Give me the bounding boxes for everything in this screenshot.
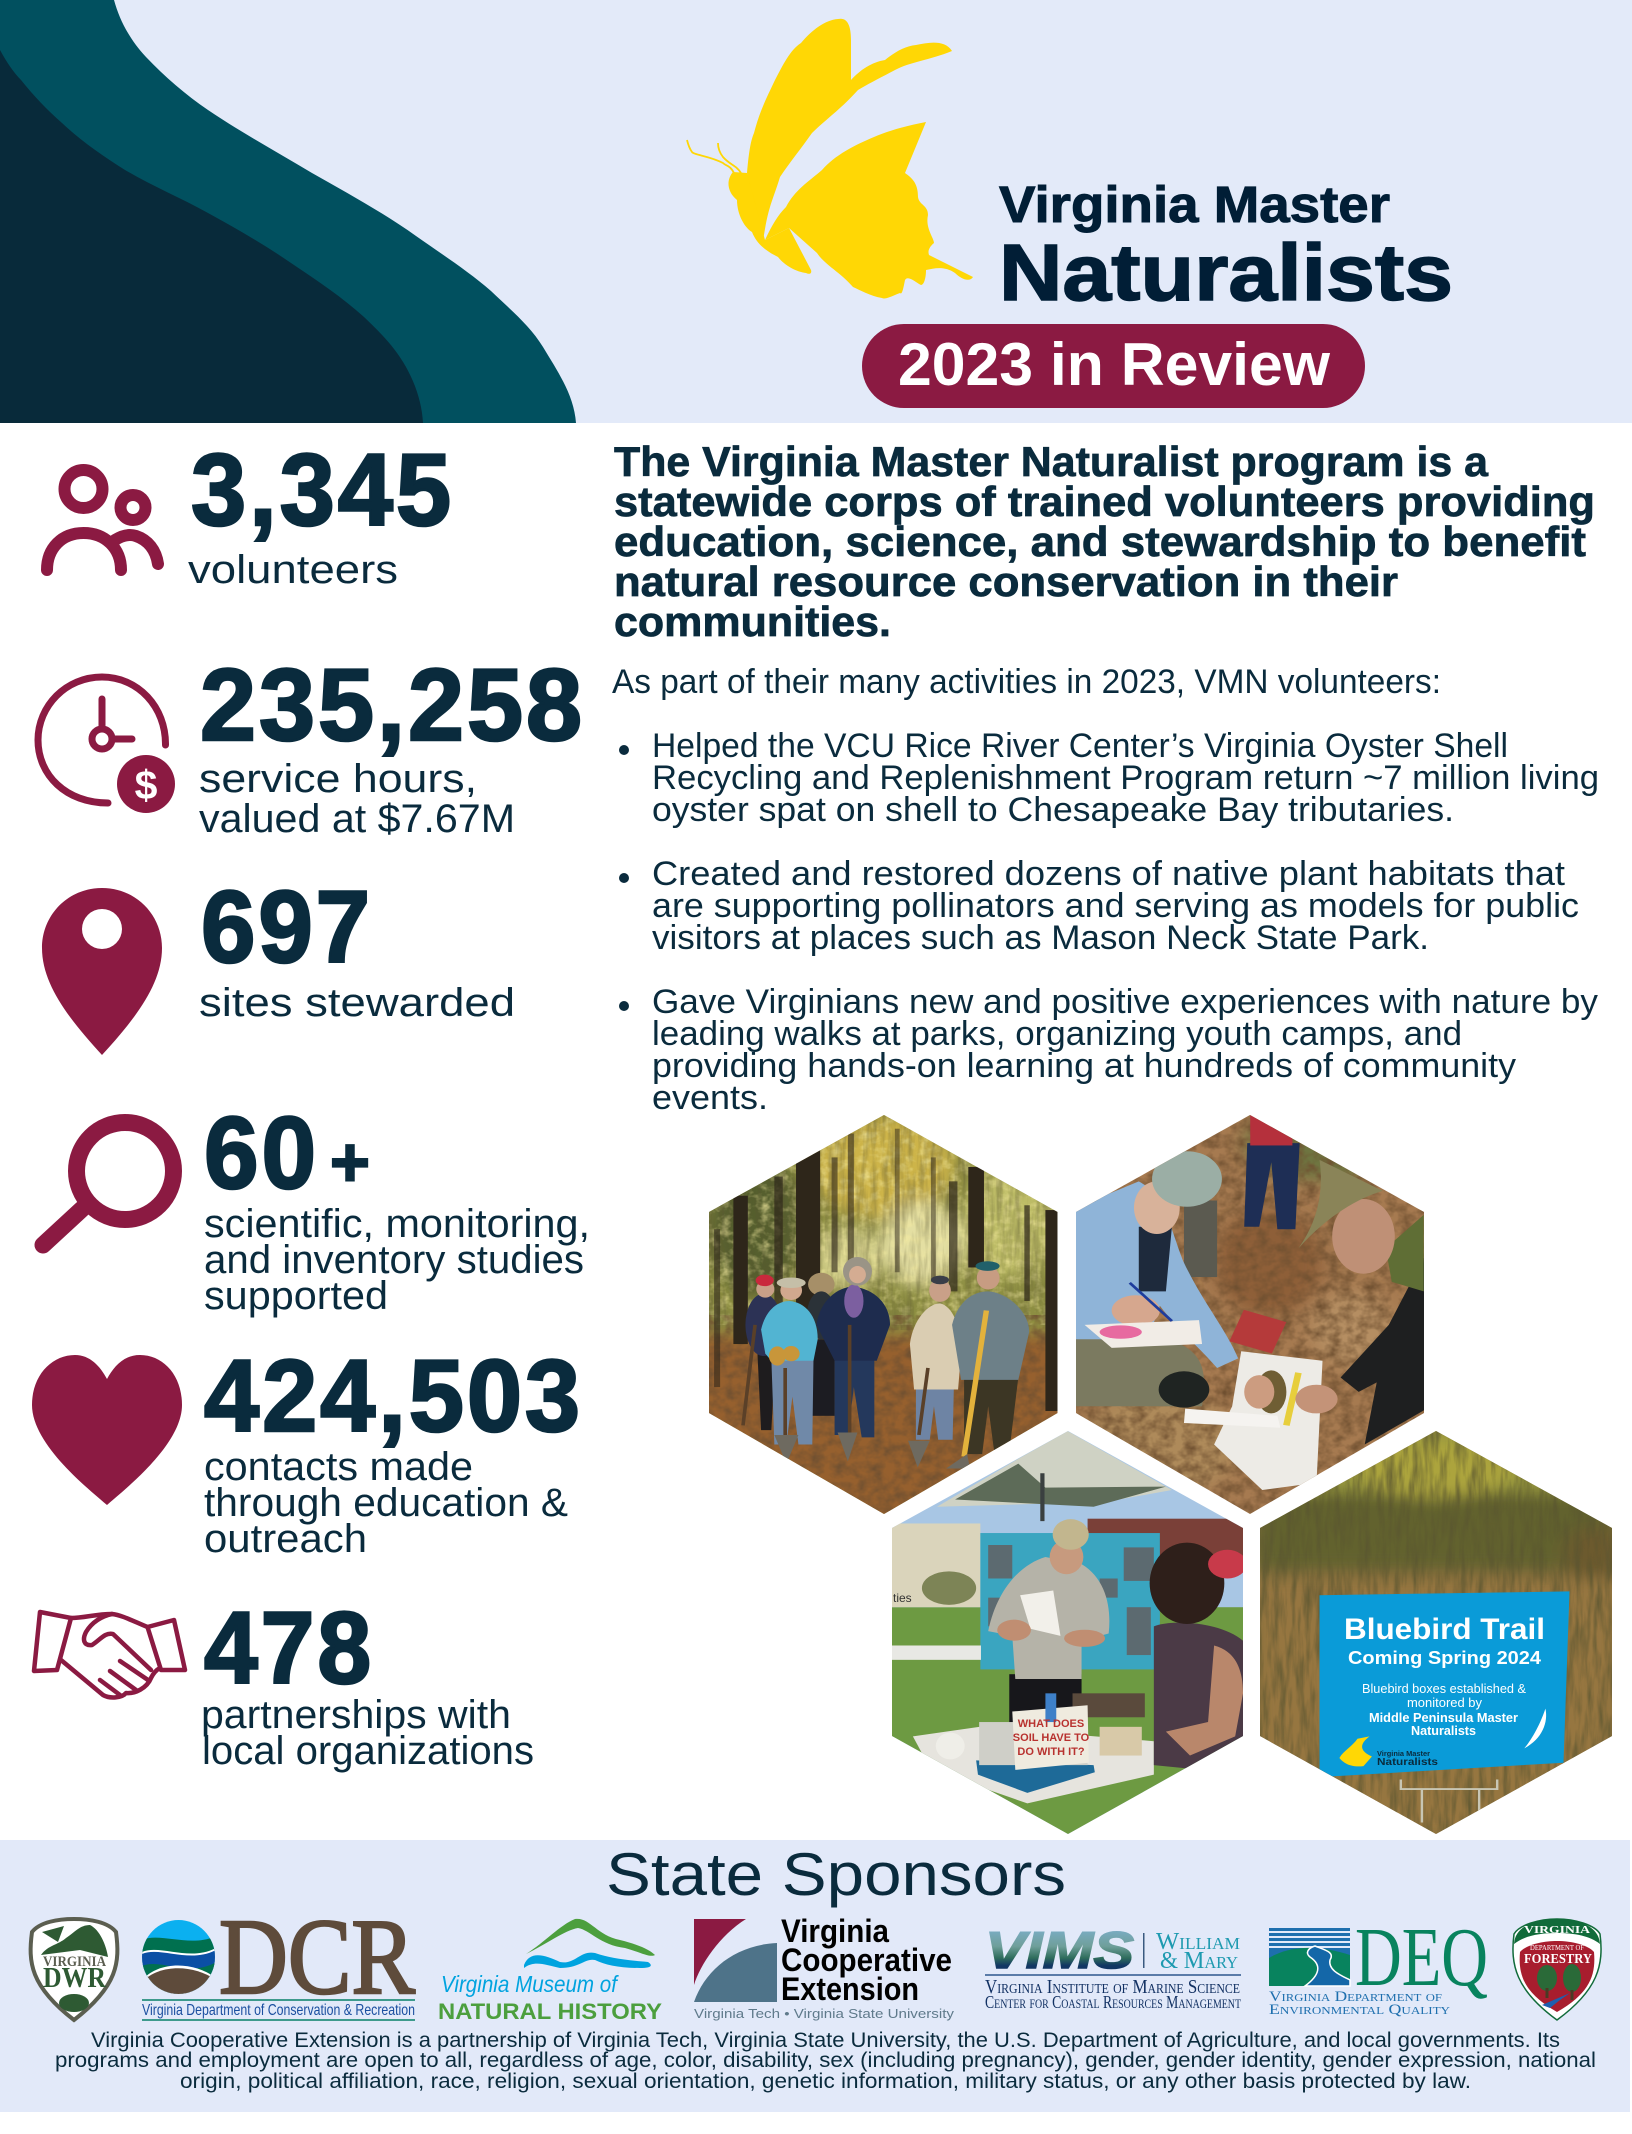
bullet: oyster spat: Recycling and Replenishment Program return ~7 million living: [652, 759, 1599, 797]
bullet: native plant habitats: visitors at places such as Mason Neck State Park.: [652, 919, 1429, 957]
logo: Virginia DEQ: Environmental Quality: [1269, 2002, 1450, 2018]
intro heading: The Virginia Master Naturalist program is a: [614, 438, 1489, 485]
stat: volunteers: volunteers: [188, 548, 398, 592]
sign text: Bluebird Trail: [1344, 1613, 1545, 1646]
sign logo text: Virginia Master: [1377, 1751, 1430, 1758]
logo: VIMS William and Mary: Center for Coastal Resources Management: [985, 1992, 1241, 2012]
heading: State Sponsors: State Sponsors: [606, 1841, 1066, 1908]
sign text: Bluebird boxes established &: [1362, 1681, 1526, 1696]
stat: service hours: service hours,: [199, 757, 477, 801]
man with hat: [1298, 1160, 1431, 1445]
brick building: [1088, 1518, 1243, 1556]
banner fragment text: ties: [893, 1591, 912, 1605]
stat: contacts made: through education &: [204, 1481, 568, 1525]
logo: Virginia Museum of Natural History: [438, 1919, 662, 2024]
icon: clock with dollar: [38, 677, 175, 813]
logo: Virginia Cooperative Extension: Cooperative: [781, 1942, 952, 1978]
stat: service hours: 235,258: [200, 648, 585, 762]
icon: handshake: [34, 1612, 185, 1697]
photo: outreach table under a tent: [889, 1425, 1250, 1842]
non-discrimination statement: origin, political affiliation, race, religion, sexual orientation, genetic information, military status, or any other basis protected by law.: [180, 2070, 1471, 2093]
bullet: native plant habitats: Created and restored dozens of native plant habitats that: [652, 855, 1566, 893]
intro heading: statewide corps of trained volunteers providing: [614, 478, 1595, 525]
icon: heart: [32, 1355, 182, 1505]
intro heading: education, science, and stewardship to benefit: [614, 518, 1586, 565]
logo: DCR: Virginia Department of Conservation & Recreation: [142, 2002, 415, 2019]
stat: contacts made: [32, 1339, 583, 1561]
bullet: nature experiences: Gave Virginians new and positive experiences with nature by: [652, 983, 1598, 1021]
logo: Virginia Cooperative Extension: [694, 1913, 955, 2021]
lead-in sentence: As part of their many activities in 2023, VMN volunteers:: [612, 663, 1441, 701]
sign text: Naturalists: [1411, 1723, 1476, 1738]
hindwing: [765, 122, 973, 299]
sign text: Middle Peninsula Master: [1369, 1710, 1518, 1725]
stat: partnerships: partnerships with: [201, 1693, 511, 1737]
logo: Virginia DEQ: Virginia Department of: [1269, 1989, 1442, 2005]
title pill: 2023 in Review: [862, 324, 1365, 408]
footer band: [0, 1840, 1630, 2112]
bullet: oyster spat: [619, 727, 1599, 829]
forewing: [747, 19, 952, 240]
logo: Virginia Cooperative Extension: Extension: [781, 1971, 919, 2007]
banner: [889, 1523, 980, 1607]
bullet: native plant habitats: [619, 855, 1579, 957]
non-discrimination statement: programs and employment are open to all, regardless of age, color, disability, sex (including pregnancy), gender, gender identity, gender expression, national: [55, 2049, 1596, 2072]
sign text: DO WITH IT?: [1017, 1746, 1085, 1758]
bullet: nature experiences: providing hands-on learning at hundreds of community: [652, 1047, 1516, 1085]
logo wordmark: Virginia Master Naturalists: [999, 176, 1453, 317]
sign text: monitored by: [1407, 1695, 1482, 1710]
non-discrimination statement: Virginia Cooperative Extension is a partnership of Virginia Tech, Virginia State University, the U.S. Department of Agriculture, and local governments. Its: [91, 2029, 1560, 2052]
header band: [0, 0, 1632, 423]
non-discrimination statement: [55, 2029, 1596, 2093]
woman with curly hair: [1150, 1543, 1247, 1770]
logo: Virginia DEQ: DEQ: [1355, 1911, 1488, 2004]
bullet: oyster spat: oyster spat on shell to Chesapeake Bay tributaries.: [652, 791, 1454, 829]
stat: studies supported: 60: [204, 1096, 319, 1210]
icon: clock with dollar: $: [135, 762, 158, 808]
logo: VIMS William and Mary: William: [1156, 1929, 1240, 1955]
stat: contacts made: outreach: [204, 1517, 367, 1561]
white bag and papers: [1184, 1351, 1338, 1490]
logo: VIMS William and Mary: & Mary: [1160, 1948, 1238, 1974]
stat: volunteers: [47, 433, 454, 592]
white tabletop: [913, 1727, 1154, 1803]
display board: [980, 1533, 1160, 1669]
logo: Virginia Department of Forestry: VIRGINIA: [1524, 1925, 1591, 1936]
sign text: Coming Spring 2024: [1348, 1648, 1541, 1668]
logo: DCR: [142, 1920, 416, 2021]
sign text: [1013, 1720, 1089, 1755]
bullet: nature experiences: events.: [652, 1079, 768, 1117]
stat: studies supported: and inventory studies: [204, 1238, 584, 1282]
logo: Virginia Cooperative Extension: Virginia Tech • Virginia State University: [694, 2006, 955, 2021]
sign text: SOIL HAVE TO: [1013, 1732, 1090, 1744]
logo: Virginia Department of Forestry: DEPARTMENT OF: [1530, 1944, 1584, 1952]
body and tail: [728, 172, 811, 274]
sign logo text: Naturalists: [1377, 1757, 1439, 1768]
stat: studies supported: supported: [204, 1274, 388, 1318]
stat: contacts made: 424,503: [204, 1339, 583, 1453]
logo wordmark: Virginia Master Naturalists: Virginia Master: [999, 176, 1390, 233]
photo: volunteers inspecting a plant sample: [1070, 1105, 1431, 1521]
seated woman: [1070, 1151, 1238, 1408]
logo: Virginia Department of Forestry: FORESTRY: [1524, 1952, 1592, 1967]
stat: volunteers: 3,345: [191, 433, 454, 547]
logo: Virginia Museum of Natural History: Virginia Museum of: [441, 1971, 619, 1997]
bullet: oyster spat: Helped the VCU Rice River Center’s Virginia Oyster Shell: [652, 727, 1508, 765]
sign logo text: [1377, 1750, 1438, 1765]
antennae: [687, 140, 741, 173]
logo: Virginia Cooperative Extension: Virginia: [781, 1913, 889, 1949]
logo: DCR: DCR: [219, 1898, 415, 2017]
teal wave: [0, 0, 576, 423]
stat: studies supported: scientific, monitoring,: [204, 1202, 590, 1246]
bullet: nature experiences: leading walks at parks, organizing youth camps, and: [652, 1015, 1462, 1053]
dark navy wave: [0, 50, 423, 423]
icon: people: [47, 470, 158, 570]
stat: partnerships: [34, 1591, 534, 1773]
tent canopy: [937, 1431, 1172, 1507]
man in grey sweatshirt: [988, 1519, 1109, 1727]
stat: sites stewarded: 697: [201, 870, 373, 984]
icon: map pin: [42, 888, 162, 1055]
folding table: [892, 1645, 981, 1660]
bullet: native plant habitats: are supporting pollinators and serving as models for public: [652, 887, 1579, 925]
intro heading: natural resource conservation in their: [614, 558, 1398, 605]
stat: partnerships: 478: [204, 1591, 374, 1705]
stat: contacts made: contacts made: [204, 1445, 473, 1489]
sign tray: [976, 1760, 1095, 1793]
sign text: [1344, 1613, 1545, 1738]
logo: Virginia DWR shield: VIRGINIA: [43, 1954, 106, 1970]
stat: studies supported: [43, 1096, 590, 1318]
grass: [889, 1607, 1250, 1842]
photo: volunteers with shovels in autumn forest: [709, 1115, 1058, 1514]
logo: VIMS William and Mary: [985, 1922, 1241, 2012]
stat: sites stewarded: sites stewarded: [199, 981, 515, 1025]
sign text: WHAT DOES: [1018, 1718, 1084, 1730]
stat: sites stewarded: [42, 870, 515, 1055]
logo: Virginia Department of Forestry: [1513, 1919, 1601, 2020]
stat: service hours: valued at $7.67M: [199, 797, 515, 841]
stat: partnerships: local organizations: [202, 1729, 534, 1773]
logo: Virginia Museum of Natural History: NATURAL HISTORY: [438, 1999, 662, 2024]
bullet: nature experiences: [619, 983, 1598, 1117]
title pill: 2023 in Review: 2023 in Review: [898, 331, 1330, 398]
logo: Virginia DWR shield: [31, 1919, 117, 2020]
logo: Virginia DEQ: [1269, 1911, 1488, 2018]
stat: studies supported: +: [330, 1123, 370, 1201]
logo: VIMS William and Mary: VIMS: [985, 1922, 1134, 1980]
intro heading: [614, 438, 1595, 645]
standing person in jeans: [1244, 1114, 1300, 1229]
photo: Bluebird Trail sign in meadow: [1256, 1425, 1624, 1842]
stat: service hours: [38, 648, 585, 841]
logo: VIMS William and Mary: Virginia Institute of Marine Science: [985, 1976, 1240, 1998]
logo: yellow butterfly: [687, 19, 973, 299]
logo: Virginia DWR shield: DWR: [43, 1963, 107, 1994]
logo wordmark: Virginia Master Naturalists: Naturalists: [999, 228, 1453, 317]
icon: magnifying glass: [43, 1122, 174, 1245]
intro heading: communities.: [614, 598, 891, 645]
